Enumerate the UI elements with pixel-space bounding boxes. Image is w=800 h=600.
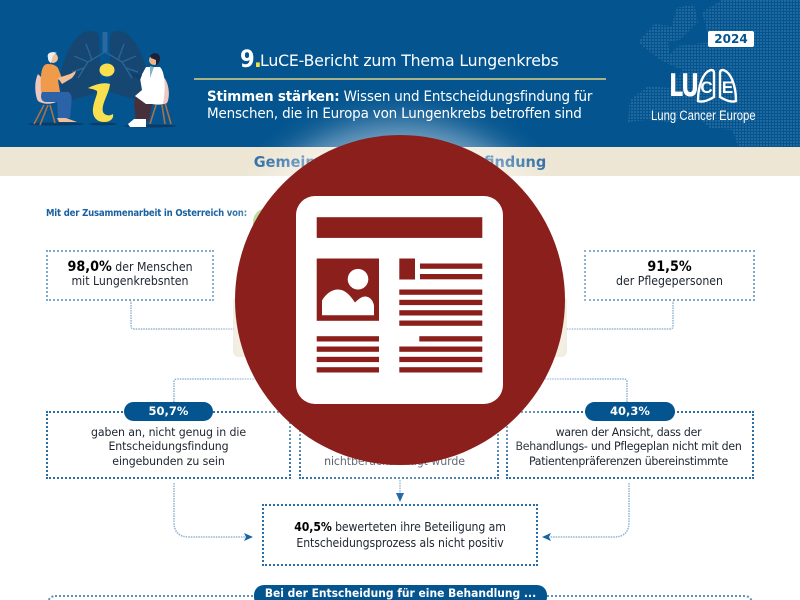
pill: 40,3%: 40,3% bbox=[610, 404, 650, 418]
box: 40,5%: Entscheidungsprozess als nicht positiv bbox=[296, 536, 504, 550]
box: 50,7% bbox=[46, 411, 291, 479]
box: 40,5% bbox=[262, 504, 538, 566]
icon: newspaper bbox=[296, 196, 503, 404]
box: 50,7%: Entscheidungsfindung bbox=[108, 439, 229, 453]
central panel bbox=[233, 296, 567, 357]
logo: E bbox=[722, 78, 733, 97]
report title bbox=[240, 45, 559, 73]
report subtitle: Menschen, die in Europa von Lungenkrebs betroffen sind bbox=[207, 105, 582, 122]
header band bbox=[0, 0, 800, 147]
box: patients bbox=[46, 250, 214, 301]
box: 40,3%: waren der Ansicht, dass der bbox=[556, 425, 701, 439]
article placeholder badge bbox=[235, 135, 565, 465]
box: 40,3% bbox=[506, 411, 754, 479]
report subtitle bbox=[207, 88, 592, 122]
box: 40,5%: 40,5% bewerteten ihre Beteiligung am bbox=[294, 520, 506, 534]
section heading band bbox=[0, 147, 800, 176]
report title: 9. bbox=[240, 45, 261, 73]
logo bbox=[651, 68, 756, 123]
box: caregivers: 91,5% bbox=[647, 259, 692, 275]
lungs bbox=[60, 31, 148, 100]
box: patients: mit Lungenkrebsnten bbox=[71, 274, 188, 288]
lower panel outline bbox=[47, 595, 753, 600]
box: 50,7%: eingebunden zu sein bbox=[112, 454, 225, 468]
box: 40,3%: Behandlungs- und Pflegeplan nicht mit den bbox=[515, 439, 741, 453]
box: middle bbox=[299, 411, 499, 479]
year badge: 2024 bbox=[714, 32, 748, 46]
collaboration label: Mit der Zusammenarbeit in Österreich von: bbox=[46, 208, 247, 219]
section heading band: Gemeinsame Entscheidungsfindung bbox=[254, 153, 546, 171]
pill: 50,7% bbox=[124, 402, 213, 421]
box: middle: nichtberücksichtigt wurde bbox=[324, 454, 465, 468]
logo: Lung Cancer Europe bbox=[651, 108, 756, 123]
ground shadows bbox=[28, 122, 176, 128]
year badge bbox=[708, 31, 754, 47]
austria map fragment bbox=[253, 208, 283, 238]
illustration: patient and doctor with lungs bbox=[28, 30, 176, 128]
logo: C bbox=[700, 78, 713, 97]
box: caregivers: der Pflegepersonen bbox=[616, 274, 723, 288]
logo: LU bbox=[669, 68, 698, 104]
pill: 50,7%: 50,7% bbox=[149, 404, 188, 418]
box: caregivers bbox=[584, 250, 755, 301]
patient bbox=[34, 52, 77, 125]
title rule bbox=[194, 78, 606, 80]
box: patients: 98,0% der Menschen bbox=[67, 259, 193, 275]
report subtitle: Stimmen stärken: Wissen und Entscheidungsfindung für bbox=[207, 88, 592, 105]
europe dot map bbox=[628, 0, 800, 146]
pill: 40,3% bbox=[585, 402, 675, 421]
doctor bbox=[128, 53, 171, 127]
box: 40,3%: Patientenpräferenzen übereinstimmte bbox=[529, 454, 728, 468]
report title: LuCE-Bericht zum Thema Lungenkrebs bbox=[260, 51, 559, 70]
letter i bbox=[88, 64, 114, 122]
box: 50,7%: gaben an, nicht genug in die bbox=[91, 425, 246, 439]
pill: treatment decision: Bei der Entscheidung für eine Behandlung ... bbox=[265, 586, 536, 600]
